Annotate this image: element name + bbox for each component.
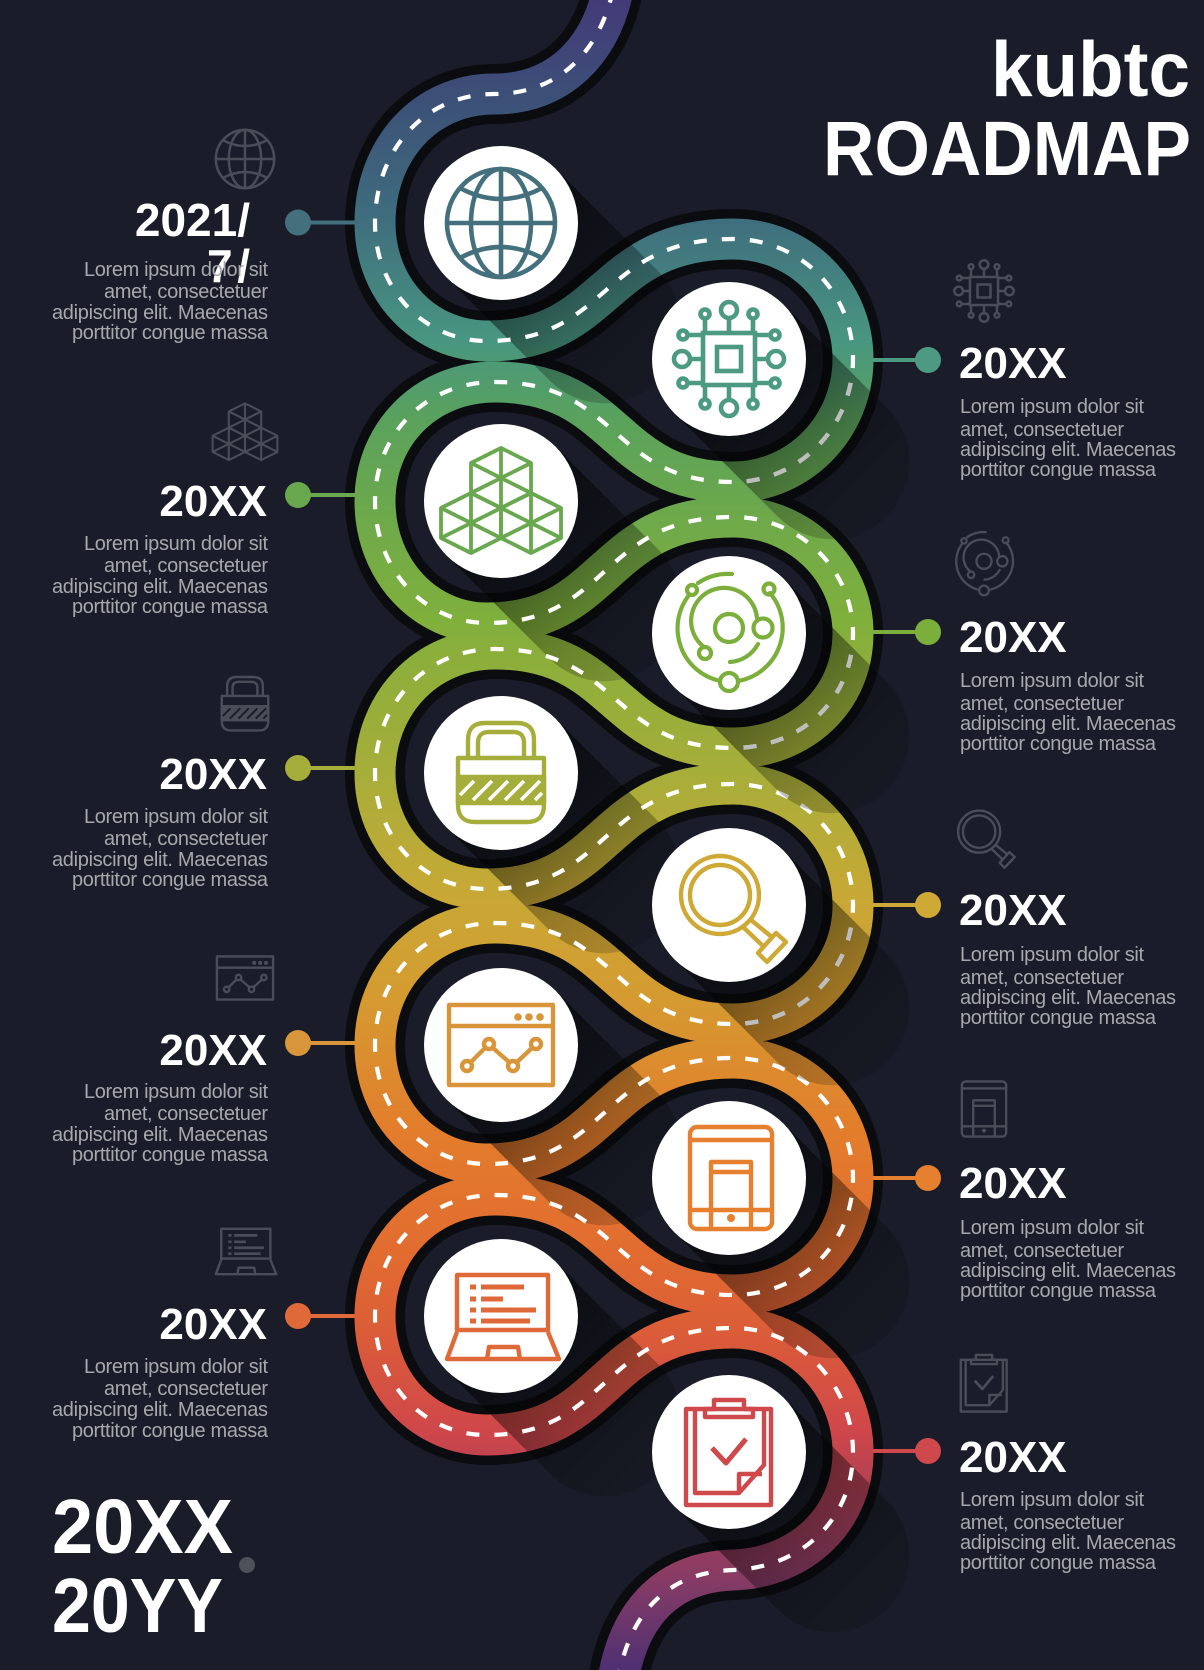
- heading 6: 20XX: [959, 886, 1067, 935]
- description 4: Lorem ipsum dolor sit: [960, 670, 1144, 692]
- heading 2: 20XX: [959, 339, 1067, 388]
- description 2: adipiscing elit. Maecenas: [960, 439, 1176, 461]
- connector 1: [285, 210, 355, 236]
- heading 9: 20XX: [159, 1300, 267, 1349]
- description 3: amet, consectetuer: [104, 555, 268, 577]
- date range: [52, 1484, 255, 1649]
- description 4: adipiscing elit. Maecenas: [960, 713, 1176, 735]
- description 8: adipiscing elit. Maecenas: [960, 1260, 1176, 1282]
- ghost tablet icon: [962, 1081, 1006, 1137]
- title: [823, 25, 1191, 192]
- description 9: [52, 1356, 269, 1442]
- description 3: porttitor congue massa: [72, 596, 269, 618]
- description 4: porttitor congue massa: [960, 733, 1157, 755]
- white circle with magnifier icon: [652, 828, 806, 982]
- description 1: Lorem ipsum dolor sit: [84, 259, 268, 281]
- description 6: amet, consectetuer: [960, 967, 1124, 989]
- description 9: Lorem ipsum dolor sit: [84, 1356, 268, 1378]
- description 8: porttitor congue massa: [960, 1280, 1157, 1302]
- description 9: amet, consectetuer: [104, 1378, 268, 1400]
- step 4 right: solar system: [652, 532, 1176, 755]
- ghost globe icon: [216, 130, 274, 188]
- white circle with orbit icon: [652, 556, 806, 710]
- description 8: amet, consectetuer: [960, 1240, 1124, 1262]
- connector 4: [873, 619, 941, 645]
- ghost lock icon: [222, 677, 268, 730]
- white circle with lock icon: [424, 696, 578, 850]
- heading 4: 20XX: [959, 613, 1067, 662]
- description 6: porttitor congue massa: [960, 1007, 1157, 1029]
- white circle with blocks icon: [424, 424, 578, 578]
- connector 7: [285, 1030, 355, 1056]
- white circle with chart window icon: [424, 968, 578, 1122]
- description 6: [960, 944, 1176, 1029]
- step 1 left: globe: [52, 130, 578, 344]
- white circle with clipboard icon: [652, 1375, 806, 1529]
- description 4: amet, consectetuer: [960, 693, 1124, 715]
- date range: 20YY: [52, 1563, 223, 1649]
- connector 3: [285, 482, 355, 508]
- step 2 right: chip: [652, 260, 1176, 481]
- title: kubtc: [991, 25, 1190, 113]
- description 7: amet, consectetuer: [104, 1103, 268, 1125]
- description 5: adipiscing elit. Maecenas: [52, 849, 268, 871]
- heading 2021/7/: 7/: [207, 240, 250, 292]
- white circle with chip icon: [652, 282, 806, 436]
- description 2: [960, 396, 1176, 481]
- connector 9: [285, 1303, 355, 1329]
- description 9: adipiscing elit. Maecenas: [52, 1399, 268, 1421]
- description 10: Lorem ipsum dolor sit: [960, 1489, 1144, 1511]
- description 1: porttitor congue massa: [72, 322, 269, 344]
- ghost chip icon: [954, 260, 1014, 322]
- description 3: [52, 533, 269, 618]
- white circle with tablet icon: [652, 1101, 806, 1255]
- connector 2: [873, 347, 941, 373]
- description 7: [52, 1081, 269, 1166]
- description 8: Lorem ipsum dolor sit: [960, 1217, 1144, 1239]
- white circle with laptop icon: [424, 1239, 578, 1393]
- ghost orbit icon: [956, 532, 1013, 595]
- description 2: amet, consectetuer: [960, 419, 1124, 441]
- description 7: porttitor congue massa: [72, 1144, 269, 1166]
- description 1: amet, consectetuer: [104, 281, 268, 303]
- step 9 left: laptop: [52, 1229, 578, 1442]
- description 7: adipiscing elit. Maecenas: [52, 1124, 268, 1146]
- description 2: Lorem ipsum dolor sit: [960, 396, 1144, 418]
- connector 6: [873, 892, 941, 918]
- description 10: porttitor congue massa: [960, 1552, 1157, 1574]
- step 3 left: blocks: [52, 403, 578, 618]
- description 10: adipiscing elit. Maecenas: [960, 1532, 1176, 1554]
- heading 3: 20XX: [159, 477, 267, 526]
- white circle with globe icon: [424, 146, 578, 300]
- description 5: [52, 806, 269, 891]
- ghost magnifier icon: [958, 811, 1015, 868]
- step 10 right: clipboard: [652, 1355, 1176, 1574]
- road: winding path with outline, shadows and centre dashes: [375, 0, 941, 1670]
- description 5: porttitor congue massa: [72, 869, 269, 891]
- connector 10: [873, 1438, 941, 1464]
- step 6 right: magnifier: [652, 811, 1176, 1029]
- ghost blocks icon: [213, 403, 277, 460]
- step 5 left: lock: [52, 677, 578, 891]
- heading 5: 20XX: [159, 750, 267, 799]
- description 3: Lorem ipsum dolor sit: [84, 533, 268, 555]
- description 9: porttitor congue massa: [72, 1420, 269, 1442]
- step 8 right: tablet: [652, 1081, 1176, 1302]
- description 10: [960, 1489, 1176, 1574]
- ghost clipboard icon: [961, 1355, 1007, 1412]
- description 1: adipiscing elit. Maecenas: [52, 302, 268, 324]
- description 3: adipiscing elit. Maecenas: [52, 576, 268, 598]
- description 7: Lorem ipsum dolor sit: [84, 1081, 268, 1103]
- description 10: amet, consectetuer: [960, 1512, 1124, 1534]
- description 6: Lorem ipsum dolor sit: [960, 944, 1144, 966]
- heading 2021/7/: 2021/: [135, 194, 250, 246]
- description 5: amet, consectetuer: [104, 828, 268, 850]
- heading 2021/7/: [135, 194, 250, 292]
- ghost laptop icon: [216, 1229, 276, 1274]
- description 2: porttitor congue massa: [960, 459, 1157, 481]
- heading 7: 20XX: [159, 1026, 267, 1075]
- description 8: [960, 1217, 1176, 1302]
- description 1: [52, 259, 269, 344]
- description 6: adipiscing elit. Maecenas: [960, 987, 1176, 1009]
- heading 8: 20XX: [959, 1159, 1067, 1208]
- description 5: Lorem ipsum dolor sit: [84, 806, 268, 828]
- heading 10: 20XX: [959, 1433, 1067, 1482]
- description 4: [960, 670, 1176, 755]
- connector 5: [285, 755, 355, 781]
- ghost chart window icon: [217, 956, 273, 1000]
- date range: 20XX: [52, 1484, 233, 1570]
- step 7 left: browser chart: [52, 956, 578, 1166]
- connector 8: [873, 1165, 941, 1191]
